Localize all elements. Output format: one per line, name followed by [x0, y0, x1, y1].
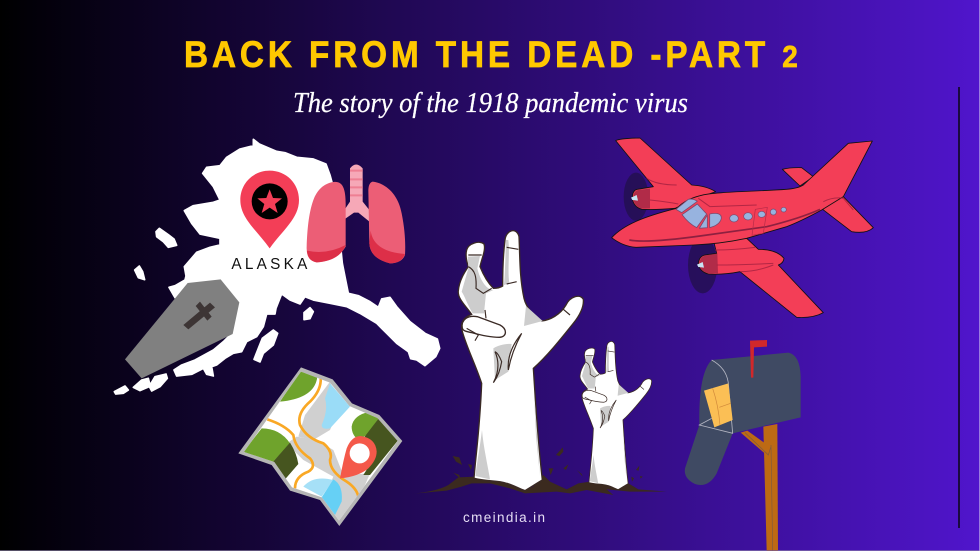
- door outline: [699, 360, 733, 433]
- propeller spinners: [631, 195, 638, 201]
- alaska silhouette: [114, 139, 440, 394]
- lower wing and engine: [698, 238, 823, 317]
- alaska label: ALASKA: [231, 256, 308, 273]
- envelope: [704, 383, 733, 427]
- soil: [410, 447, 667, 495]
- zombie hands and soil: [410, 231, 667, 495]
- fuselage stripe: [629, 209, 820, 241]
- mailbox: [685, 340, 801, 550]
- vertical rule: [958, 87, 960, 528]
- cockpit windows: [676, 199, 721, 228]
- icon: lungs: [307, 164, 405, 263]
- propeller disc upper: [624, 173, 648, 221]
- cabin windows: [730, 207, 786, 222]
- upper wing and engine: [616, 138, 716, 210]
- icon: coffin: [125, 279, 239, 378]
- fuselage: [612, 141, 872, 247]
- small hand: [580, 341, 652, 490]
- large hand: [458, 231, 583, 491]
- icon: location pin with star: [240, 171, 299, 248]
- subtitle: The story of the 1918 pandemic virus: [293, 87, 688, 119]
- airplane: [612, 138, 873, 317]
- alaska map group: [114, 139, 440, 394]
- tail fins: [782, 168, 813, 186]
- website label: cmeindia.in: [463, 510, 545, 525]
- flag: [750, 340, 767, 378]
- post: [741, 424, 778, 550]
- propeller disc lower: [688, 237, 717, 293]
- mailbox body: [699, 353, 801, 433]
- title: BACK FROM THE DEAD -PART 2: [184, 34, 798, 75]
- mailbox door: [685, 425, 733, 485]
- map icon: [238, 367, 402, 526]
